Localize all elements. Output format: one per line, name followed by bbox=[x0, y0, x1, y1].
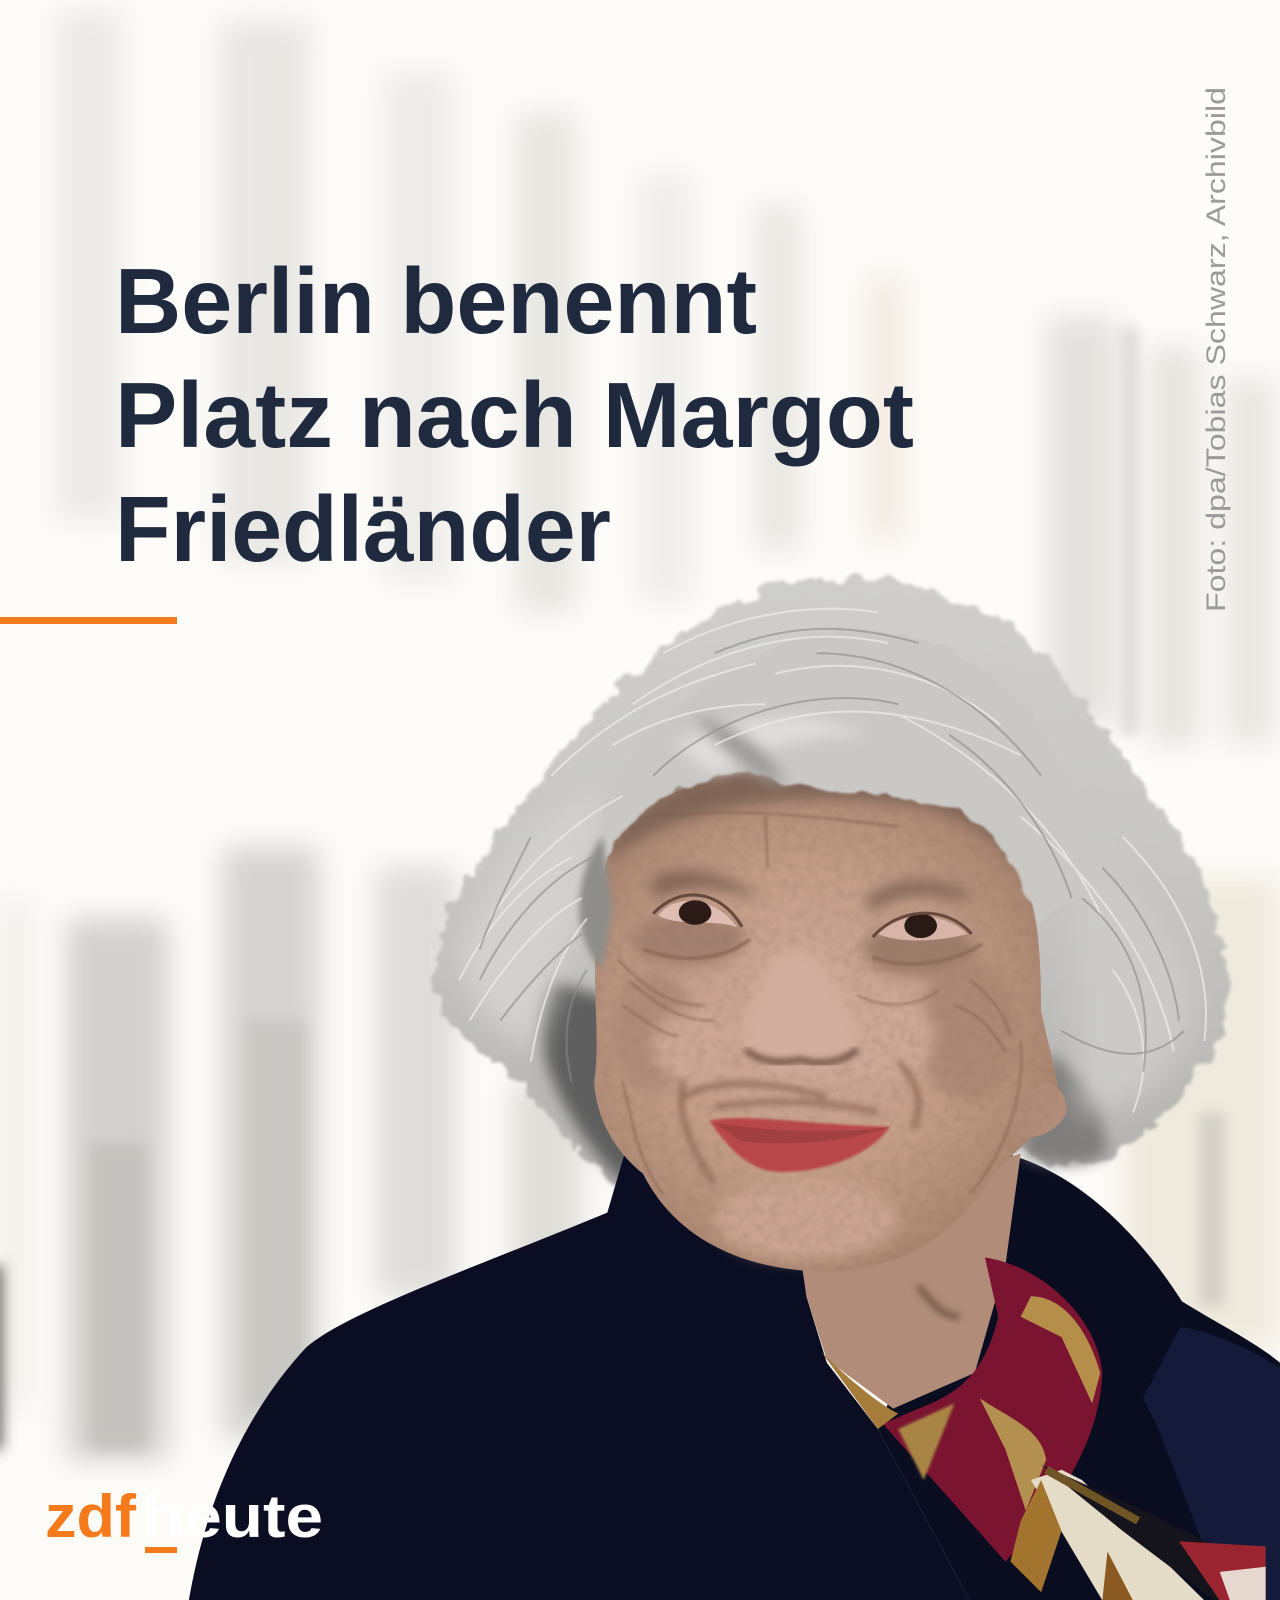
logo: ZDFheute: heute bbox=[143, 1483, 323, 1550]
dark strands bbox=[480, 629, 1184, 1082]
smile lines bbox=[681, 1062, 919, 1184]
lips bbox=[709, 1118, 890, 1172]
headline: Friedländer bbox=[115, 477, 611, 581]
fringe shadow on forehead bbox=[602, 766, 1031, 888]
eye socket shading bbox=[612, 872, 1021, 1261]
skin grain texture bbox=[598, 826, 1018, 1264]
light strands bbox=[459, 609, 1206, 1113]
coat right: dark navy jacket and collar bbox=[878, 1153, 1280, 1600]
ear bbox=[1016, 1083, 1067, 1137]
hair back: silver-grey hair bbox=[433, 577, 1228, 1204]
eyes bbox=[643, 895, 982, 964]
neck: skin below chin bbox=[796, 1153, 1021, 1409]
headline bbox=[115, 249, 914, 581]
photo credit: Foto: dpa/Tobias Schwarz, Archivbild bbox=[1201, 87, 1231, 612]
wrinkles bbox=[618, 812, 1021, 1194]
headline: Platz nach Margot bbox=[115, 363, 914, 467]
scarf: maroon and gold silk bbox=[822, 1258, 1266, 1600]
hair fringe: strands over forehead bbox=[459, 609, 1206, 1113]
logo: ZDFheute bbox=[45, 1483, 323, 1553]
coat left: dark navy jacket with stand collar bbox=[189, 1153, 970, 1600]
headline: Berlin benennt bbox=[115, 249, 757, 353]
face: wrinkled, smiling bbox=[582, 766, 1072, 1286]
logo: ZDFheute: zdf bbox=[45, 1483, 137, 1550]
orange accent bar bbox=[0, 617, 177, 624]
nose bbox=[742, 951, 858, 1063]
